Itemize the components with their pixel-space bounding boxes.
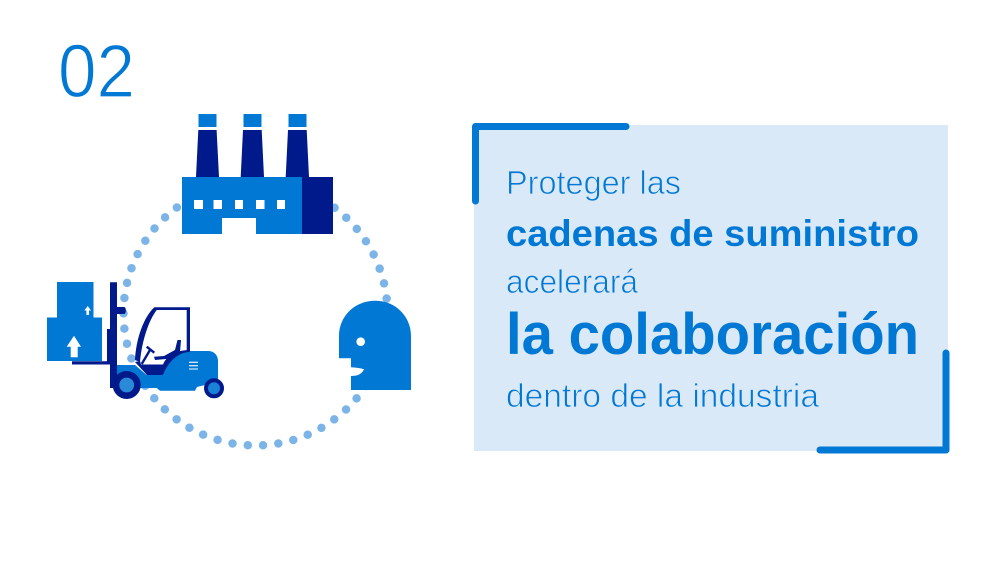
text: acelerará: acelerará (506, 263, 639, 300)
text: dentro de la industria: dentro de la industria (506, 377, 820, 414)
bottom-right bracket (820, 353, 946, 450)
icon: person head (339, 301, 411, 390)
icon: factory (182, 114, 333, 234)
wheels (116, 374, 137, 396)
mast and fork (72, 282, 126, 388)
icon: forklift with boxes (47, 282, 222, 396)
top-left bracket (476, 126, 626, 201)
cabin (135, 307, 190, 362)
grille (189, 362, 198, 369)
boxes (47, 282, 102, 361)
text: Proteger las: Proteger las (506, 164, 681, 201)
text: la colaboración: la colaboración (506, 302, 919, 367)
panel: message (474, 125, 948, 451)
body (117, 351, 218, 391)
text: cadenas de suministro: cadenas de suministro (506, 213, 919, 254)
seat, steering wheel and cab floor (135, 340, 190, 375)
number: 02: 02 (58, 29, 135, 113)
dotted circle (124, 182, 388, 446)
